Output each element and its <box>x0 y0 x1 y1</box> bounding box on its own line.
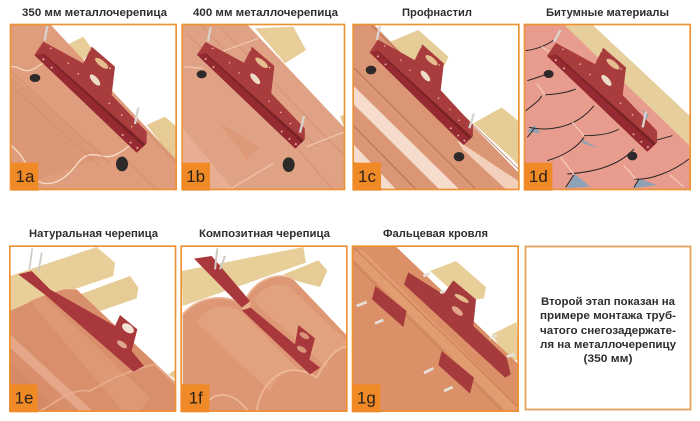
panel: 1f: 1f <box>189 389 203 408</box>
panel: 1e <box>9 246 176 412</box>
panel: 1f <box>181 246 347 412</box>
label: Композитная черепица: Композитная черепица <box>199 228 331 240</box>
panel: 1d: 1d <box>529 167 548 186</box>
label: Натуральная черепица: Натуральная черепица <box>29 228 159 240</box>
label: 350 мм металлочерепица: 350 мм металлочерепица <box>22 7 168 19</box>
panel: 1c: 1c <box>358 167 376 186</box>
panel: 1g <box>352 246 519 412</box>
text panel: note: чатого снегозадержате- <box>540 325 677 337</box>
panel: 1e: 1e <box>15 389 33 408</box>
panel: 1a: 1a <box>16 167 35 186</box>
text panel: note <box>526 246 690 410</box>
text panel: note: Второй этап показан на <box>541 296 675 308</box>
text panel: note: ля на металлочерепицу <box>540 339 676 351</box>
panel: 1b: 1b <box>186 167 205 186</box>
label: Битумные материалы: Битумные материалы <box>546 7 669 19</box>
text panel: note: (350 мм) <box>584 353 632 365</box>
panel: 1c <box>353 24 519 191</box>
panel: 1b <box>182 24 347 191</box>
label: 400 мм металлочерепица: 400 мм металлочерепица <box>193 7 339 19</box>
panel: 1a <box>10 24 178 191</box>
panel: 1g: 1g <box>357 389 376 408</box>
label: Фальцевая кровля: Фальцевая кровля <box>383 228 488 240</box>
label: Профнастил: Профнастил <box>402 7 472 19</box>
text panel: note: примере монтажа труб- <box>540 310 677 322</box>
panel: 1d <box>524 24 691 191</box>
